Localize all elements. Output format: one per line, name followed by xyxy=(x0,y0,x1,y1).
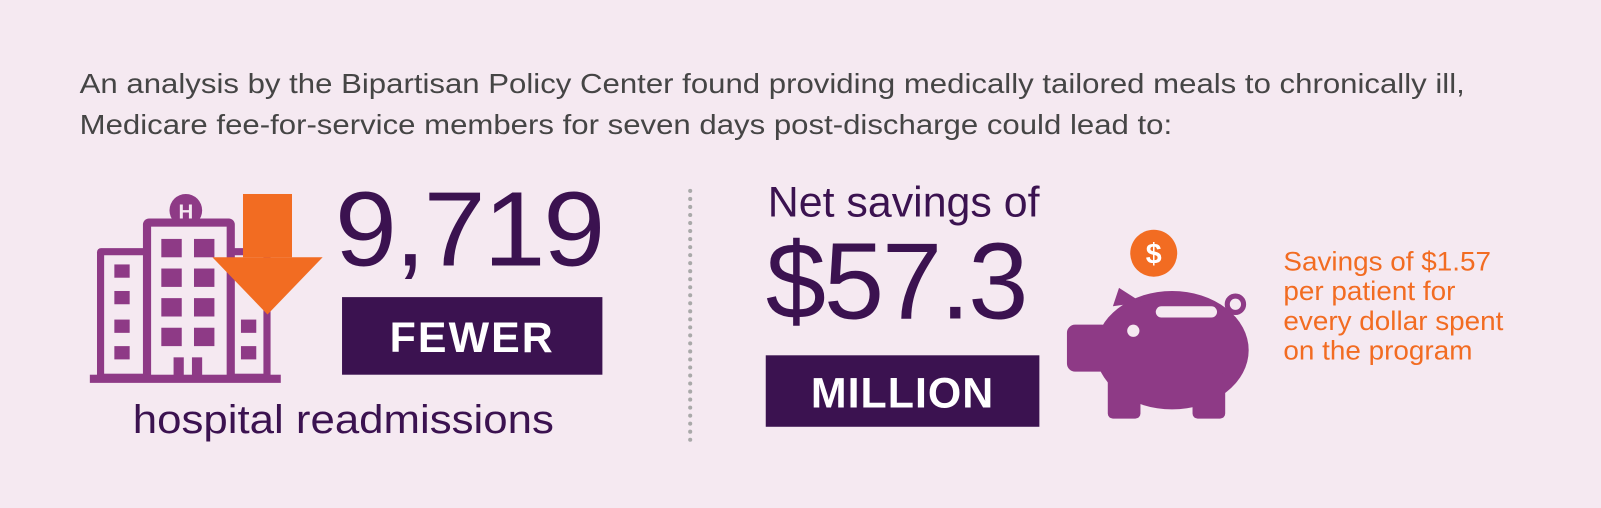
caption: hospital readmissions: hospital readmissions xyxy=(133,398,554,442)
stat: $57.3: $57.3 xyxy=(766,222,1026,342)
label box: MILLION: MILLION xyxy=(811,369,994,417)
intro text: Medicare fee-for-service members for seven days post-discharge could lead to: xyxy=(80,109,1172,140)
callout: savings per dollar xyxy=(1283,246,1504,366)
intro text xyxy=(80,68,1465,140)
icon: hospital with down arrow: H xyxy=(178,201,193,223)
callout: savings per dollar: per patient for xyxy=(1283,276,1455,306)
label box: FEWER xyxy=(342,297,602,375)
label box: FEWER: FEWER xyxy=(390,313,555,361)
icon: piggy bank with coin: $ xyxy=(1146,238,1162,270)
label box: MILLION xyxy=(766,355,1039,427)
callout: savings per dollar: every dollar spent xyxy=(1283,305,1503,336)
callout: savings per dollar: Savings of $1.57 xyxy=(1283,246,1491,277)
icon: piggy bank with coin xyxy=(1066,230,1249,419)
intro text: An analysis by the Bipartisan Policy Center found providing medically tailored meals to chronically ill, xyxy=(80,68,1465,99)
stat: 9,719: 9,719 xyxy=(335,171,603,289)
icon: hospital with down arrow xyxy=(90,194,322,383)
heading: Net savings of: Net savings of xyxy=(768,178,1040,226)
callout: savings per dollar: on the program xyxy=(1283,335,1472,366)
